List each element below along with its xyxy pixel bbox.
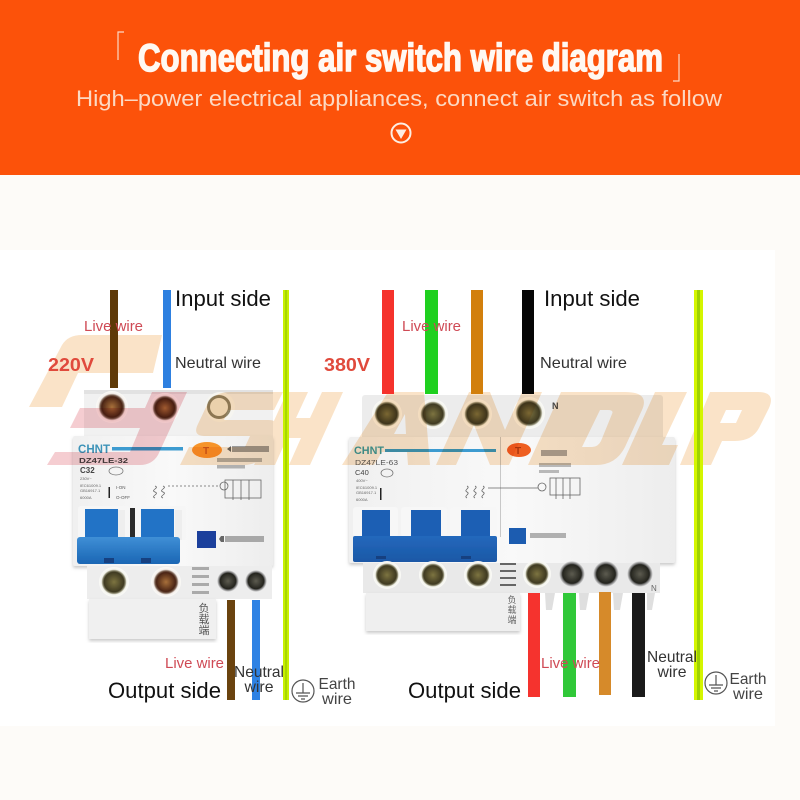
model labels: I-ON: [116, 485, 126, 490]
title corner bracket left: [118, 32, 124, 60]
blue reset square: [509, 528, 526, 544]
breaker body: [73, 436, 273, 566]
circuit schematic: [154, 480, 261, 500]
top terminal block: N: [552, 401, 558, 411]
icon: earth symbol: [292, 680, 314, 702]
subtitle: High–power electrical appliances, connect air switch as follow: [76, 86, 722, 111]
label: live wire in: Live wire: [402, 318, 461, 335]
wire: brown live out: [227, 600, 235, 700]
lower cover: [89, 599, 216, 639]
diagram panel: [0, 250, 775, 726]
reset caption: [219, 536, 264, 542]
button caption: [217, 446, 269, 468]
model labels: [79, 456, 130, 500]
wire: black out: [632, 593, 645, 697]
label: neutral wire out: wire: [244, 679, 274, 696]
brand stripe: [112, 447, 183, 450]
terminal prongs: [545, 593, 655, 610]
blue toggle bar: [353, 536, 497, 562]
load end label: [198, 600, 210, 638]
right labels: [324, 286, 766, 703]
watermark lettering: [180, 392, 771, 465]
label: earth wire: [730, 671, 766, 703]
label: earth wire: [318, 676, 356, 708]
label: 220V: 220V: [48, 355, 94, 375]
watermark: [29, 335, 771, 465]
load end label: [507, 593, 517, 626]
wires: left output: [227, 600, 260, 700]
circuit schematic: [466, 478, 580, 499]
lower terminal block: N: [651, 584, 657, 593]
label: output side: Output side: [408, 678, 521, 703]
model labels: DZ47LE-32: [79, 456, 128, 465]
blue reset square: [197, 531, 216, 548]
label: earth wire: Earth: [730, 671, 766, 688]
lower terminal block: [363, 560, 660, 593]
brand label CHNT: CHNT: [354, 445, 384, 457]
label: input side: Input side: [175, 286, 271, 311]
model labels: [355, 460, 398, 502]
load end label: 载: [198, 611, 210, 627]
header banner: [0, 0, 800, 175]
wire: green: [425, 290, 438, 394]
wire: black: [522, 290, 534, 394]
model labels: DZ47LE-63: [355, 460, 398, 467]
label: neutral wire out: wire: [657, 664, 687, 681]
label: output side: Output side: [108, 678, 221, 703]
wire: blue neutral in: [163, 290, 171, 388]
wire: red: [382, 290, 394, 394]
wire: right earth: [694, 290, 703, 700]
button caption: [539, 450, 571, 473]
test button: T: [203, 446, 209, 457]
top terminal block: [84, 390, 273, 442]
label: live wire out: Live wire: [165, 655, 224, 672]
wire: blue neutral out: [252, 600, 260, 700]
icon: earth symbol: [705, 672, 727, 694]
model labels: 400V~: [356, 478, 368, 483]
wire: green out: [563, 593, 576, 697]
breaker body: [349, 437, 675, 563]
wires: left input: [110, 290, 171, 388]
wire: orange out: [599, 592, 611, 695]
brand stripe: [385, 449, 496, 452]
test button: T: [515, 446, 521, 457]
handles: [78, 506, 186, 541]
label: neutral wire out: [647, 649, 697, 681]
wire: left earth: [283, 290, 289, 700]
watermark logo: [29, 335, 187, 465]
label: live wire in: Live wire: [84, 318, 143, 335]
divider: [500, 437, 501, 537]
label: live wire out: Live wire: [541, 655, 600, 672]
lower cover: [366, 593, 520, 631]
load end label: 负: [507, 593, 517, 606]
label: neutral wire in: Neutral wire: [540, 355, 627, 372]
model labels: C40: [355, 468, 369, 477]
right breaker 380V: [349, 395, 675, 631]
label: earth wire: wire: [732, 686, 763, 703]
handles: [353, 507, 497, 537]
blue toggle bar: [77, 537, 180, 564]
top terminal block: [362, 395, 663, 443]
page background: [0, 175, 800, 800]
wire: orange: [471, 290, 483, 394]
model labels: 6000A: [80, 495, 92, 500]
wires: right input: [382, 290, 534, 394]
load end label: 端: [198, 622, 210, 638]
load end label: 载: [507, 603, 517, 616]
left breaker 220V: [73, 390, 273, 639]
lower terminal block: [87, 566, 272, 599]
reset caption: [530, 533, 566, 538]
label: neutral wire out: [234, 664, 284, 696]
label: neutral wire out: Neutral: [647, 649, 697, 666]
test button: [507, 443, 531, 457]
left labels: [48, 286, 356, 708]
test button: [192, 442, 222, 458]
load end label: 端: [507, 613, 517, 626]
label: earth wire: wire: [321, 691, 352, 708]
brand label CHNT: CHNT: [78, 442, 111, 456]
label: 380V: 380V: [324, 355, 370, 375]
model labels: GB16917.1: [356, 490, 377, 495]
title corner bracket right: [673, 54, 679, 81]
model labels: IEC61009.1: [80, 483, 102, 488]
wire: red out: [528, 593, 540, 697]
load end label: 负: [198, 600, 210, 616]
label: earth wire: Earth: [318, 676, 356, 693]
label: neutral wire in: Neutral wire: [175, 355, 261, 372]
model labels: 6000A: [356, 497, 368, 502]
title: Connecting air switch wire diagram: [138, 37, 663, 80]
model labels: IEC61009.1: [356, 485, 378, 490]
wires: right output: [528, 592, 645, 697]
label: input side: Input side: [544, 286, 640, 311]
model labels: GB16917.1: [80, 488, 101, 493]
label: neutral wire out: Neutral: [234, 664, 284, 681]
model labels: O-OFF: [116, 495, 130, 500]
model labels: 230V~: [80, 476, 92, 481]
model labels: C32: [80, 466, 95, 475]
wire: brown live in: [110, 290, 118, 388]
icon: down arrow in circle: [392, 124, 410, 142]
